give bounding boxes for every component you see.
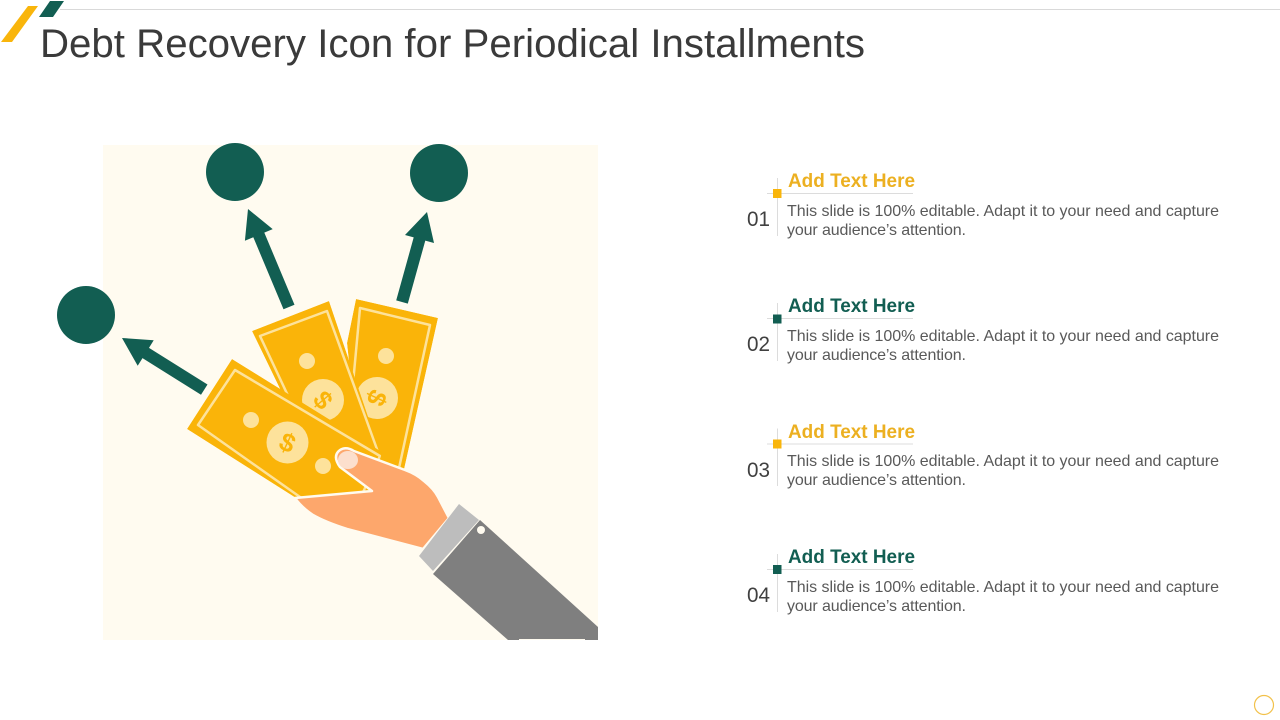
- list item 01: 01: [747, 208, 770, 231]
- arrow: to top middle circle: [245, 209, 294, 309]
- list item 02: 02: [747, 333, 770, 356]
- sleeve button: [477, 526, 485, 534]
- panel: illustration background: [103, 145, 598, 640]
- banknote: front: $: [275, 426, 301, 459]
- page marker circle: [1254, 696, 1274, 714]
- shirt cuff: [419, 504, 479, 571]
- list item 03: 03: [747, 459, 770, 482]
- list item 04: This slide is 100% editable. Adapt it to your need and capture: [787, 579, 1219, 596]
- list item 04: your audience’s attention.: [787, 598, 966, 615]
- arrow: to left circle: [122, 338, 208, 395]
- list item 04: 04: [747, 584, 770, 607]
- list item 02: This slide is 100% editable. Adapt it to your need and capture: [787, 328, 1219, 345]
- banknote: back: [345, 299, 438, 482]
- banknote: front: [187, 359, 381, 497]
- icon: circle top middle: [206, 143, 264, 201]
- list item 04: Add Text Here: [788, 546, 915, 568]
- banknote: back: $: [360, 385, 394, 411]
- list item 02: Add Text Here: [788, 295, 915, 317]
- list item 01: This slide is 100% editable. Adapt it to your need and capture: [787, 203, 1219, 220]
- list item 03: your audience’s attention.: [787, 472, 966, 489]
- hand: [295, 448, 449, 549]
- list item 01: Add Text Here: [788, 170, 915, 192]
- icon: hand holding banknotes: [187, 299, 598, 640]
- fingernail: [338, 451, 358, 469]
- list item 01: [747, 170, 1219, 239]
- list item 03: Add Text Here: [788, 421, 915, 443]
- logo accent: slashes: [1, 1, 64, 42]
- banknote: middle: $: [307, 385, 339, 416]
- list item 03: This slide is 100% editable. Adapt it to your need and capture: [787, 453, 1219, 470]
- list item 02: your audience’s attention.: [787, 347, 966, 364]
- list item 04: [747, 546, 1219, 615]
- jacket sleeve: [433, 520, 598, 640]
- list item 02: [747, 295, 1219, 364]
- list item 03: [747, 421, 1219, 489]
- title: Debt Recovery Icon for Periodical Installments: [40, 22, 865, 66]
- banknote: middle: [252, 301, 381, 455]
- arrow: to top right circle: [396, 212, 434, 304]
- icon: circle top right: [410, 144, 468, 202]
- list item 01: your audience’s attention.: [787, 222, 966, 239]
- icon: circle left: [57, 286, 115, 344]
